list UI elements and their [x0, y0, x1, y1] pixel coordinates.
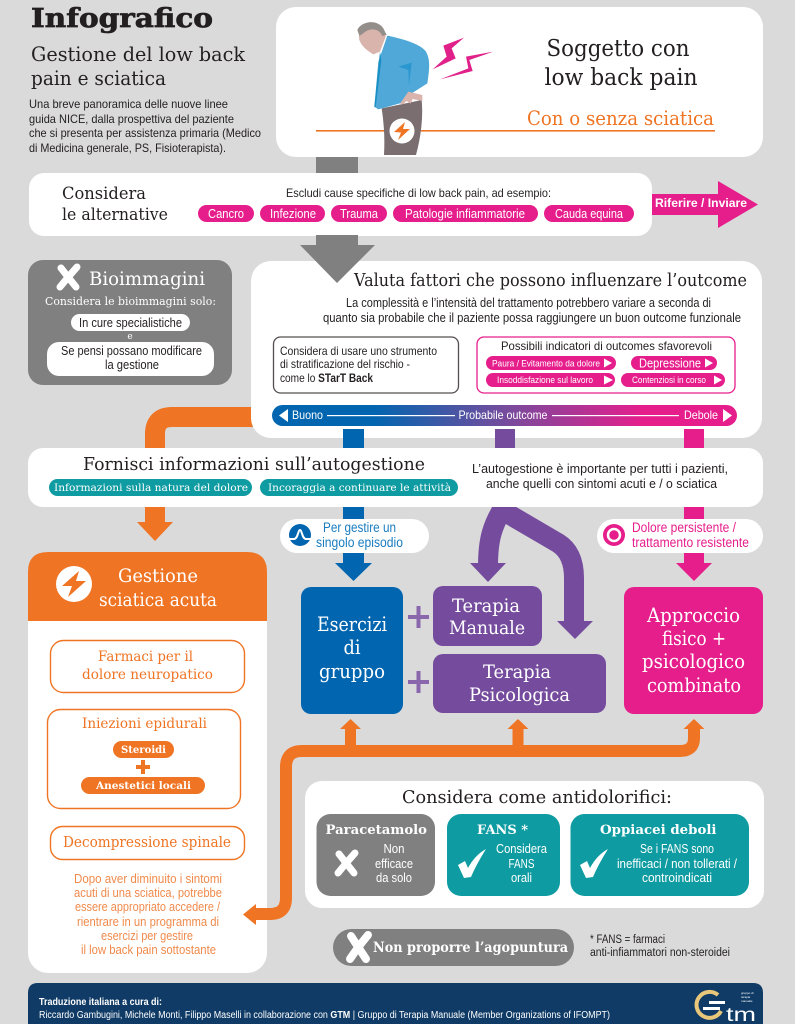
box: risk stratification: [274, 337, 458, 393]
callout: persistent pain: Dolore persistente /: [632, 520, 736, 535]
icon: sciatica bolt: [390, 118, 414, 144]
icon: plus top: [408, 606, 429, 628]
card: paracetamol: Non: [384, 841, 404, 856]
box: neuropathic drugs: Farmaci per il: [98, 649, 193, 665]
box: manual therapy: [433, 586, 542, 646]
box: epidural injections: Anestetici locali: [95, 780, 191, 792]
arrow: purple stem top: [495, 429, 515, 449]
outcome gradient bar: [272, 405, 737, 426]
callout: single episode: Per gestire un: [323, 520, 396, 535]
arrow: purple stem: [495, 429, 515, 519]
arrow: refer onwards: Riferire / Inviare: [655, 196, 747, 210]
description: Una breve panoramica delle nuove linee: [29, 97, 228, 111]
credits: Riccardo Gambugini, Michele Monti, Filippo Maselli in collaborazione con GTM | Gruppo di Terapia Manuale (Member Organizations of IFOMPT): [39, 1010, 610, 1021]
arrow: pink stem: [684, 429, 704, 564]
outcome gradient bar: Probabile outcome: [458, 408, 548, 422]
note text: acuti di una sciatica, potrebbe: [74, 886, 222, 900]
heading second line: le alternative: [62, 205, 168, 225]
card: NSAIDs: Considera: [496, 841, 548, 856]
card: weak opioids: inefficaci / non tollerati /: [617, 856, 737, 871]
box: unfavourable indicators: Possibili indicatori di outcomes sfavorevoli: [501, 339, 712, 353]
pills: causes: [198, 205, 634, 222]
description: di Medicina generale, PS, Fisioterapista).: [29, 141, 226, 155]
note text: il low back pain sottostante: [81, 943, 216, 957]
card: weak opioids: Oppiacei deboli: [600, 823, 717, 838]
pills: causes: Cauda equina: [555, 207, 623, 221]
heading: Soggetto con: [546, 36, 690, 62]
box: unfavourable indicators: Paura / Evitamento da dolore: [492, 358, 600, 370]
box: group exercise: [301, 587, 403, 714]
arrow: refer onwards: [650, 181, 758, 228]
logo: manuale: [741, 999, 753, 1003]
box: spinal decompression: Decompressione spinale: [63, 835, 231, 851]
note text: Dopo aver diminuito i sintomi: [74, 872, 222, 886]
arrow: blue stem: [343, 429, 364, 564]
box: unfavourable indicators: Depressione: [639, 356, 701, 370]
icon: episode curve: [289, 524, 311, 546]
card: weak opioids: controindicati: [642, 870, 712, 885]
arrow head: pink: [676, 563, 712, 581]
panel: imaging: [28, 260, 232, 385]
box: manual therapy: Manuale: [449, 617, 525, 639]
heading second line: low back pain: [544, 65, 698, 91]
outcome gradient bar: Buono: [292, 408, 323, 422]
panel: self-management information: [28, 448, 763, 507]
icon: lightning: [56, 566, 92, 602]
pills: causes: Cancro: [208, 207, 244, 221]
description: [29, 97, 261, 155]
orange divider line: [316, 130, 715, 132]
icon: plus bottom: [408, 671, 429, 693]
icon: man with back pain: [357, 22, 493, 155]
side text: [472, 461, 728, 491]
pills: causes: Trauma: [340, 207, 378, 221]
card: weak opioids: [570, 814, 749, 896]
body text: quanto sia probabile che il paziente possa raggiungere un buon outcome funzionale: [323, 311, 741, 325]
arrow: grey connector between top panel and alternatives: [316, 150, 358, 180]
box: combined approach: psicologico: [642, 649, 745, 673]
pill: nature of pain: Informazioni sulla natura del dolore: [54, 482, 248, 494]
pill: change management: Se pensi possano modificare: [61, 344, 202, 358]
box: epidural injections: [48, 710, 240, 808]
box: psychological therapy: [433, 654, 606, 713]
card: paracetamol: da solo: [376, 870, 412, 885]
arrow: blue stem top: [343, 429, 364, 449]
callout: single episode: [280, 519, 429, 553]
logo: gruppo di: [741, 991, 754, 995]
footnote: [590, 934, 730, 959]
intro text: Escludi cause specifiche di low back pain, ad esempio:: [286, 186, 551, 200]
logo: [697, 991, 756, 1024]
box: spinal decompression: [50, 826, 244, 860]
footnote: anti-infiammatori non-steroidei: [590, 947, 730, 959]
footnote: * FANS = farmaci: [590, 934, 665, 946]
callout: persistent pain: trattamento resistente: [632, 535, 749, 550]
note text: esercizi per gestire: [101, 929, 193, 943]
pill: change management: [47, 342, 214, 376]
note text: [74, 872, 222, 957]
arrow: grey down to assessment: [300, 235, 375, 283]
panel: pain relief: [305, 781, 764, 908]
pill: continue activity: Incoraggia a continuare le attività: [268, 482, 451, 494]
pill: specialist care: In cure specialistiche: [79, 316, 182, 330]
heading: Considera come antidolorifici:: [402, 787, 672, 808]
card: paracetamol: efficace: [375, 856, 413, 871]
side text: L’autogestione è importante per tutti i pazienti,: [472, 461, 728, 476]
box: unfavourable indicators: Contenziosi in corso: [632, 375, 706, 386]
card: weak opioids: Se i FANS sono: [640, 841, 714, 856]
box: psychological therapy: Psicologica: [469, 684, 570, 706]
note text: essere appropriato accedere /: [75, 900, 220, 914]
outcome gradient bar: Debole: [684, 408, 718, 422]
card: NSAIDs: FANS: [508, 856, 535, 871]
panel: acute sciatica management: [28, 552, 267, 973]
box: risk stratification: di stratificazione del rischio -: [280, 357, 410, 371]
heading second line: sciatica acuta: [99, 590, 217, 611]
arrow: orange to acute sciatica: [137, 417, 260, 541]
logo: terapia: [741, 995, 751, 999]
box: epidural injections: Steroidi: [121, 744, 166, 756]
pills: causes: Infezione: [270, 207, 316, 221]
box: epidural injections: Iniezioni epidurali: [82, 716, 208, 732]
box: unfavourable indicators: [477, 337, 735, 393]
pill: change management: la gestione: [105, 358, 159, 372]
description: che si presenta per assistenza primaria (Medico: [29, 126, 261, 140]
card: NSAIDs: FANS *: [477, 823, 528, 838]
note text: rientrare in un programma di: [77, 915, 219, 929]
heading: Considera: [62, 184, 146, 204]
callout: persistent pain: [597, 519, 763, 553]
box: group exercise: Esercizi: [317, 612, 387, 636]
card: NSAIDs: orali: [511, 870, 532, 885]
title block: [29, 4, 261, 155]
box: risk stratification: Considera di usare uno strumento: [280, 344, 437, 358]
orange subheading: Con o senza sciatica: [527, 106, 714, 130]
panel header: [28, 552, 267, 621]
callout: no acupuncture: [333, 929, 574, 966]
box: neuropathic drugs: [50, 640, 244, 692]
callout: single episode: singolo episodio: [316, 535, 403, 550]
pill: continue activity: [260, 479, 458, 496]
subheading: Considera le bioimmagini solo:: [45, 295, 216, 308]
icon: recurring circle: [603, 524, 625, 546]
conjunction: e: [127, 332, 133, 342]
box: risk stratification: come lo STarT Back: [280, 371, 373, 385]
card: paracetamol: Paracetamolo: [326, 823, 427, 838]
heading: Gestione: [118, 566, 198, 587]
box: group exercise: gruppo: [319, 659, 385, 683]
heading: Valuta fattori che possono influenzare l’outcome: [353, 270, 747, 291]
description: guida NICE, dalla prospettiva del paziente: [29, 112, 234, 126]
card: paracetamol: [316, 814, 435, 896]
body text: La complessità e l’intensità del trattamento potrebbero variare a seconda di: [346, 296, 711, 310]
box: unfavourable indicators: Insoddisfazione sul lavoro: [497, 375, 593, 386]
pills: causes: Patologie infiammatorie: [405, 207, 525, 221]
side text: anche quelli con sintomi acuti e / o sciatica: [486, 476, 718, 491]
panel: consider alternatives: [29, 173, 652, 236]
subtitle second line: pain e sciatica: [31, 66, 166, 90]
box: combined approach: Approccio: [646, 603, 740, 627]
pill: nature of pain: [49, 479, 252, 496]
body text: [323, 296, 741, 325]
arrow head: blue: [335, 563, 372, 581]
title: Infografico: [31, 4, 213, 34]
box: manual therapy: Terapia: [452, 595, 520, 617]
box: combined approach: fisico +: [662, 626, 726, 650]
box: group exercise: di: [344, 635, 360, 659]
box: combined approach: [624, 587, 763, 714]
credits heading: Traduzione italiana a cura di:: [39, 997, 162, 1008]
arrow: orange network: [243, 719, 704, 925]
box: neuropathic drugs: dolore neuropatico: [82, 667, 213, 683]
heading: Fornisci informazioni sull’autogestione: [83, 454, 425, 475]
callout: no acupuncture: Non proporre l’agopuntura: [373, 940, 568, 956]
panel: assess outcome factors: [251, 261, 762, 438]
heading: Bioimmagini: [89, 268, 205, 290]
icon: cross: [60, 267, 77, 287]
box: psychological therapy: Terapia: [483, 661, 551, 683]
panel: subject with low back pain: [276, 7, 763, 157]
footer: [28, 983, 763, 1024]
box: combined approach: combinato: [647, 673, 741, 697]
arrow: pink stem top: [684, 429, 704, 449]
arrow: purple fork: [470, 505, 593, 639]
card: NSAIDs: [447, 814, 560, 896]
subtitle: Gestione del low back: [31, 42, 246, 66]
